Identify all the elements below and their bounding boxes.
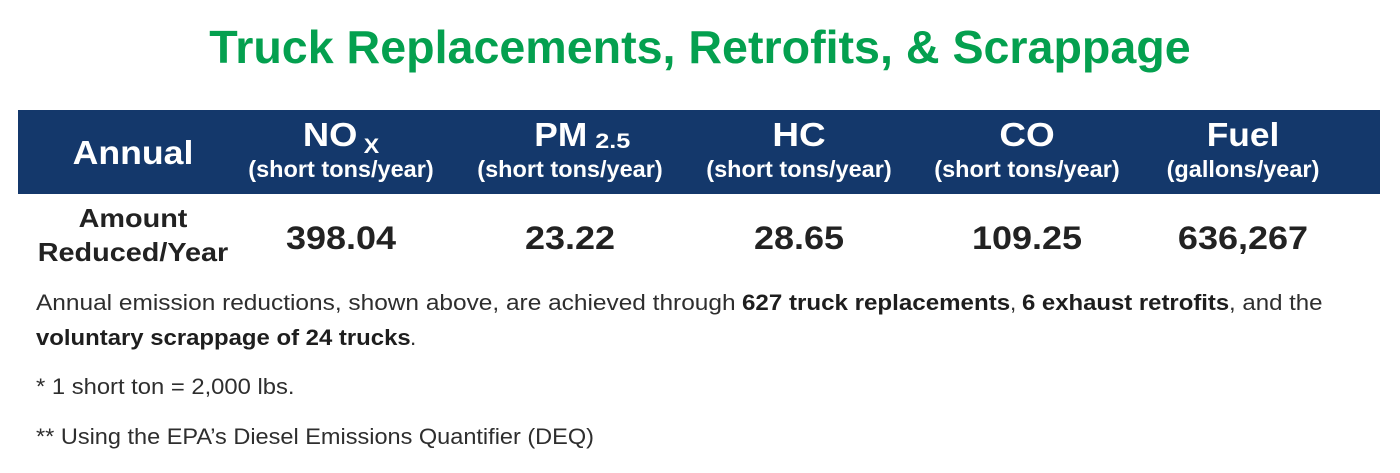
header: NOx bbox=[248, 116, 434, 182]
description text: 627 truck replacements bbox=[742, 290, 1010, 315]
description text: voluntary scrappage of 24 trucks bbox=[36, 325, 411, 350]
value: NOx: 398.04 bbox=[286, 220, 396, 256]
description text: Annual emission reductions, shown above, are achieved through bbox=[36, 290, 736, 315]
header: HC: HC bbox=[772, 116, 826, 153]
footnote: DEQ: ** Using the EPA’s Diesel Emissions Quantifier (DEQ) bbox=[36, 424, 594, 449]
header: Fuel: Fuel bbox=[1207, 116, 1279, 153]
value: Fuel: 636,267 bbox=[1178, 220, 1308, 256]
value: HC: 28.65 bbox=[754, 220, 844, 256]
header: HC: (short tons/year) bbox=[706, 156, 892, 182]
header: Fuel: (gallons/year) bbox=[1167, 156, 1319, 182]
title: Truck Replacements, Retrofits, & Scrappage bbox=[209, 21, 1191, 73]
header: NOx: (short tons/year) bbox=[248, 156, 434, 182]
description text: , bbox=[1010, 290, 1016, 315]
row label: Amount bbox=[79, 203, 187, 233]
footnote: short ton: * 1 short ton = 2,000 lbs. bbox=[36, 374, 294, 399]
description text: , and the bbox=[1229, 290, 1323, 315]
header: Fuel bbox=[1167, 116, 1319, 182]
description text: 6 exhaust retrofits bbox=[1022, 290, 1229, 315]
value: CO: 109.25 bbox=[972, 220, 1082, 256]
value: PM2.5: 23.22 bbox=[525, 220, 615, 256]
header: HC bbox=[706, 116, 892, 182]
description text bbox=[36, 290, 1323, 350]
table header band bbox=[18, 110, 1380, 194]
header: Annual: Annual bbox=[73, 134, 193, 171]
description text: . bbox=[410, 325, 416, 350]
header: PM2.5: (short tons/year) bbox=[477, 156, 663, 182]
header: PM2.5: 2.5 bbox=[595, 130, 630, 153]
row label bbox=[38, 203, 228, 267]
header: PM2.5: PM bbox=[534, 116, 587, 153]
header: CO bbox=[934, 116, 1120, 182]
header: CO: (short tons/year) bbox=[934, 156, 1120, 182]
header: CO: CO bbox=[999, 116, 1055, 153]
row label: Reduced/Year bbox=[38, 237, 228, 267]
header: PM2.5 bbox=[477, 116, 663, 182]
header: NOx: NO X bbox=[303, 116, 379, 158]
